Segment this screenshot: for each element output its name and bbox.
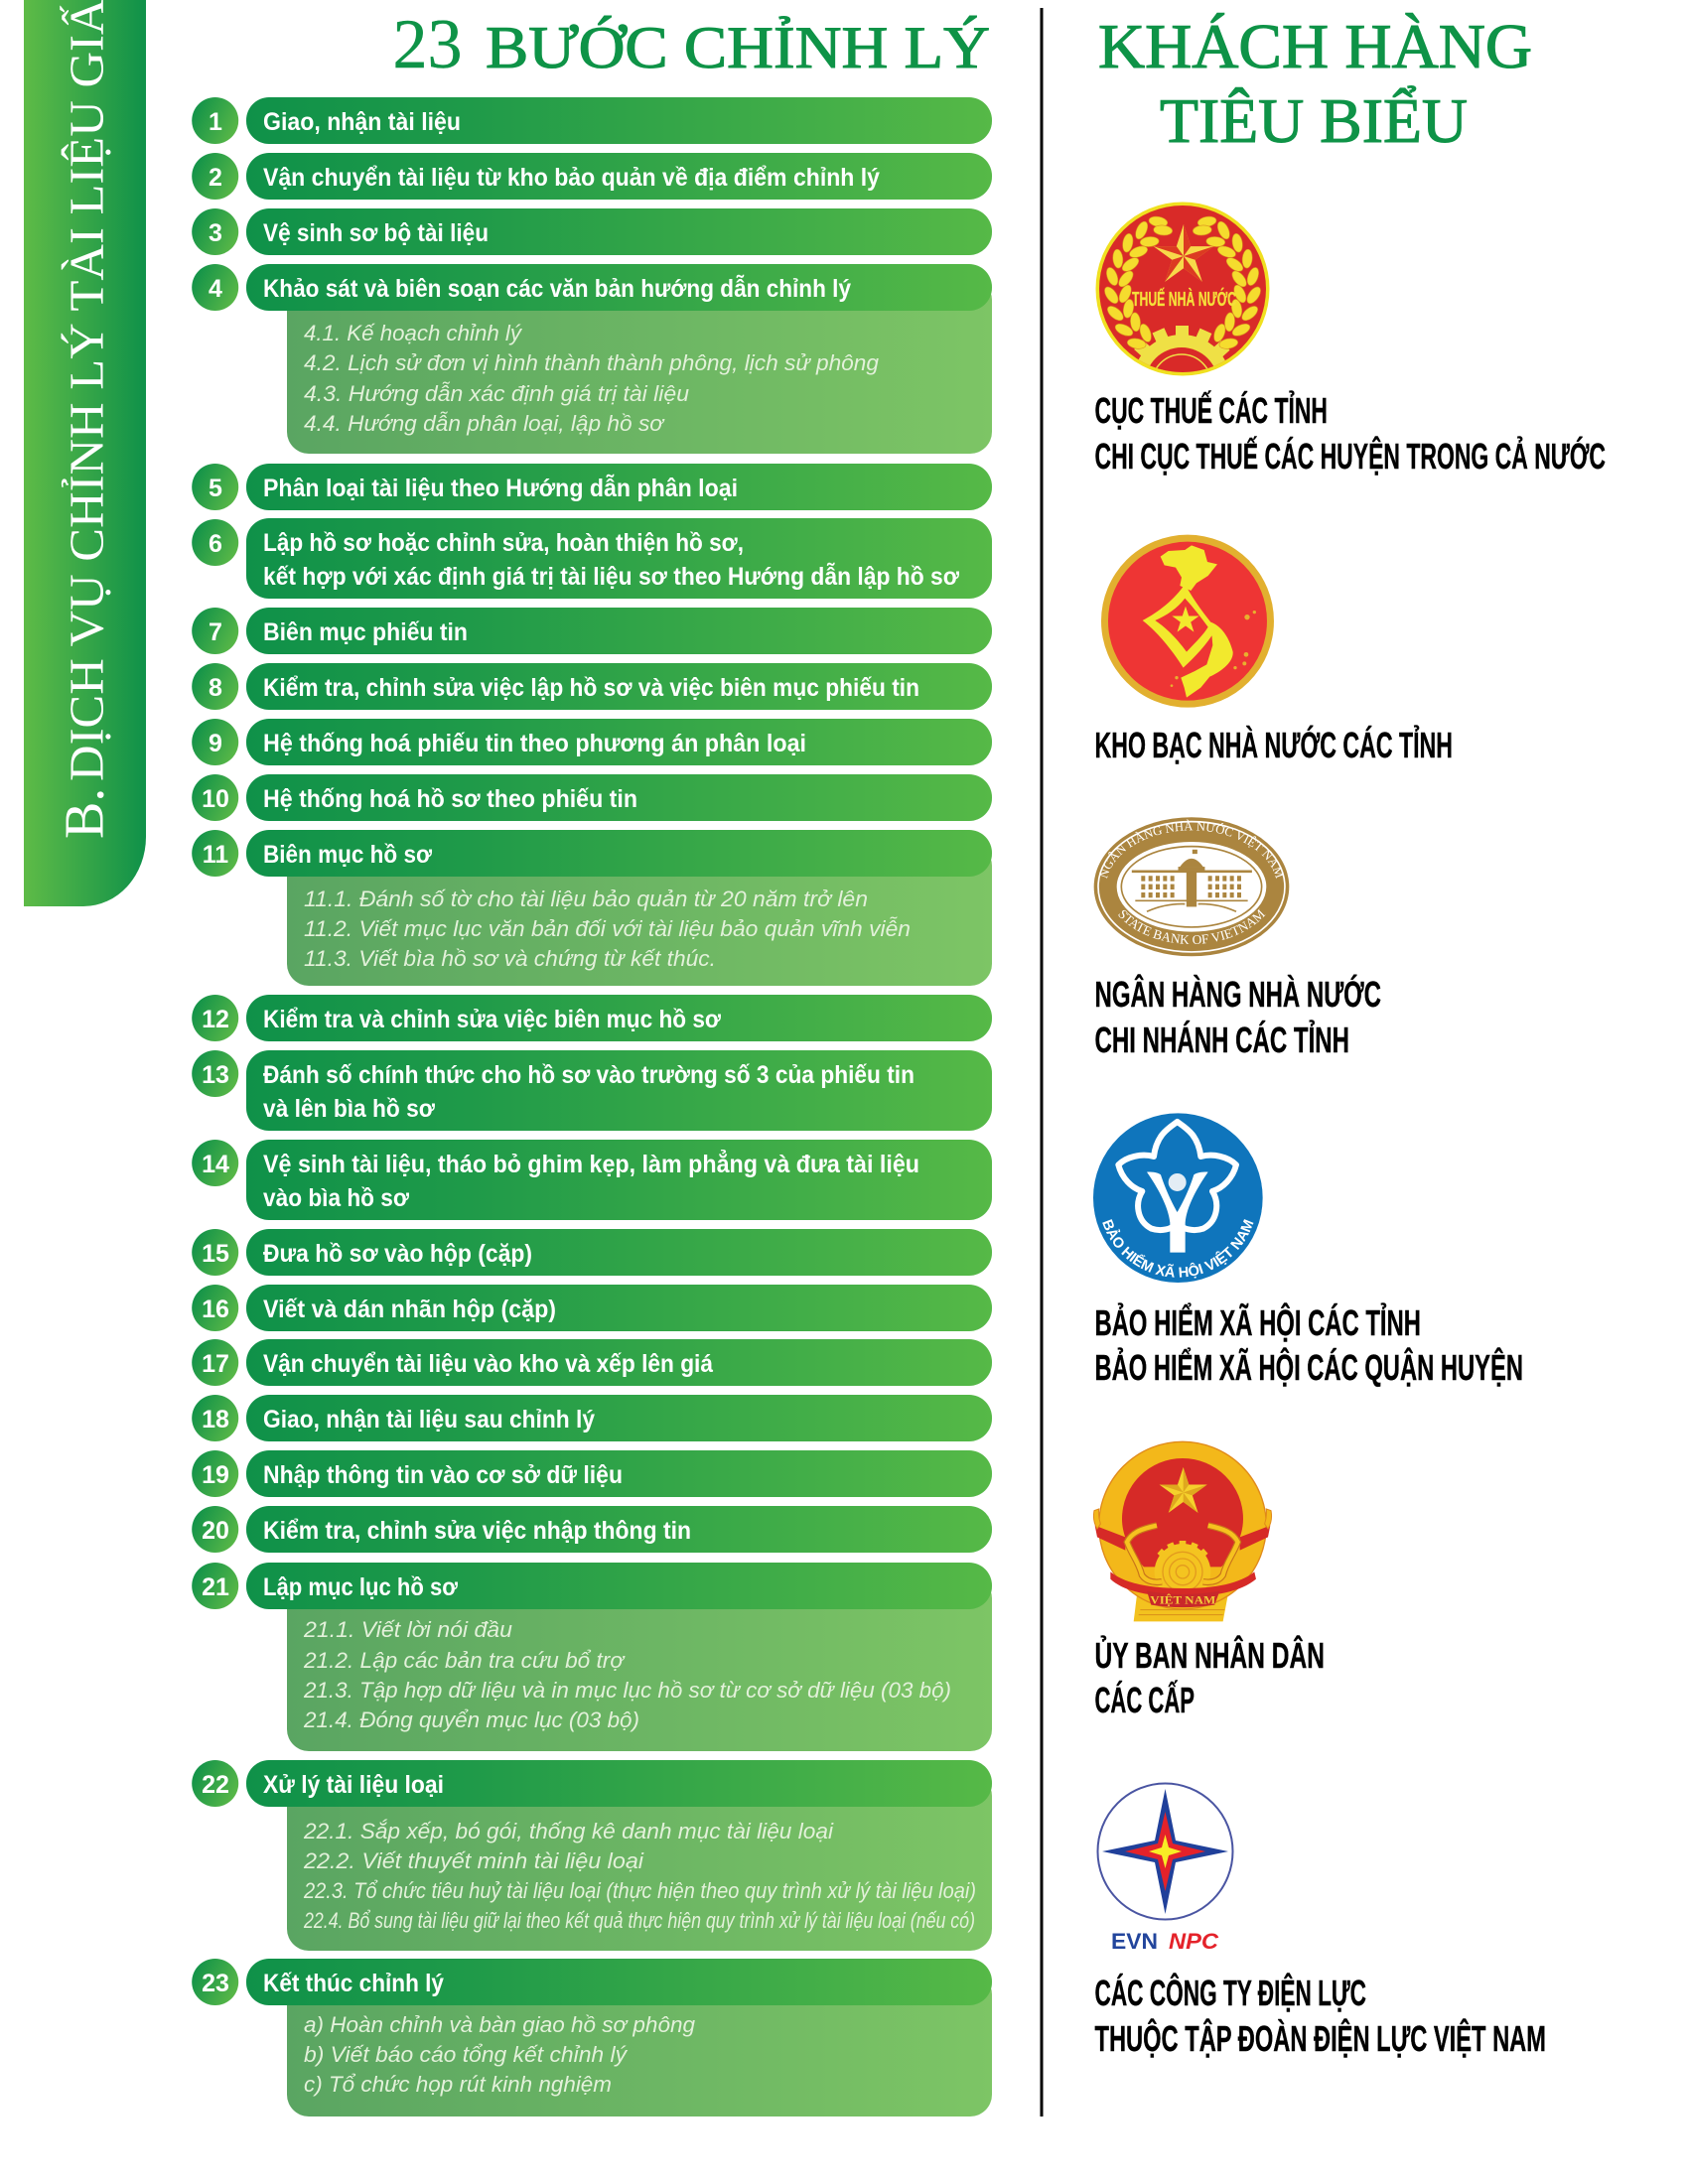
icon: tax department emblem: THUẾ NHÀ NƯỚC — [1132, 287, 1236, 311]
title: 23 steps: BƯỚC CHỈNH LÝ — [486, 15, 990, 80]
badge 3: 3 — [209, 219, 222, 247]
bar 14 — [246, 1140, 992, 1220]
bar 2 — [246, 153, 992, 200]
sub-items 22: 22.1. Sắp xếp, bó gói, thống kê danh mục tài liệu loại — [303, 1819, 834, 1843]
badge 2: 2 — [209, 164, 222, 192]
sub-items 21: 21.2. Lập các bản tra cứu bổ trợ — [303, 1648, 626, 1673]
bar 6 — [246, 518, 992, 599]
caption: power companies: CÁC CÔNG TY ĐIỆN LỰC — [1094, 1972, 1366, 2013]
label 4: Khảo sát và biên soạn các văn bản hướng dẫn chỉnh lý — [263, 273, 851, 303]
bar 4 — [246, 264, 992, 311]
bar 22 — [246, 1760, 992, 1807]
bar 18 — [246, 1395, 992, 1441]
badge 11 — [192, 830, 238, 877]
bar 10 — [246, 774, 992, 821]
label 20: Kiểm tra, chỉnh sửa việc nhập thông tin — [263, 1517, 691, 1545]
label 10: Hệ thống hoá hồ sơ theo phiếu tin — [263, 785, 637, 813]
bar 11 — [246, 830, 992, 877]
heading: key clients — [1098, 12, 1532, 156]
label 14 — [263, 1148, 919, 1212]
icon: social insurance emblem: BẢO HIỂM XÃ HỘI VIỆT NAM — [1102, 1219, 1253, 1279]
sub-items 11: 11.2. Viết mục lục văn bản đối với tài liệu bảo quản vĩnh viễn — [304, 916, 911, 941]
badge 1: 1 — [209, 108, 222, 136]
badge 15 — [192, 1229, 238, 1276]
badge 5: 5 — [209, 475, 222, 502]
step 1 — [192, 97, 992, 144]
label 19: Nhập thông tin vào cơ sở dữ liệu — [263, 1461, 623, 1489]
step 18 — [192, 1395, 992, 1441]
badge 22 — [192, 1760, 238, 1807]
badge 6 — [192, 519, 238, 566]
step 20 — [192, 1506, 992, 1553]
label 5: Phân loại tài liệu theo Hướng dẫn phân loại — [263, 473, 738, 502]
sub-items 23: b) Viết báo cáo tổng kết chỉnh lý — [304, 2042, 629, 2067]
side banner title: B. — [54, 788, 115, 839]
label 15: Đưa hồ sơ vào hộp (cặp) — [263, 1240, 532, 1268]
badge 16: 16 — [202, 1296, 229, 1323]
label 7: Biên mục phiếu tin — [263, 618, 468, 646]
label 6 — [263, 529, 959, 591]
badge 17: 17 — [202, 1350, 229, 1378]
sub-items 22 — [303, 1819, 976, 1933]
caption: social insurance — [1094, 1301, 1523, 1388]
badge 18 — [192, 1395, 238, 1441]
bar 8 — [246, 663, 992, 710]
caption: social insurance: BẢO HIỂM XÃ HỘI CÁC TỈNH — [1094, 1301, 1421, 1343]
step 3 — [192, 208, 992, 255]
bar 9 — [246, 719, 992, 765]
step 4 — [192, 264, 992, 454]
step 19 — [192, 1450, 992, 1497]
badge 18: 18 — [202, 1406, 229, 1433]
step 10 — [192, 774, 992, 821]
sub-items 4: 4.4. Hướng dẫn phân loại, lập hồ sơ — [304, 411, 665, 436]
sub-list panel 22 — [287, 1774, 992, 1951]
step 22 — [192, 1760, 992, 1951]
badge 8 — [192, 663, 238, 710]
bar 15 — [246, 1229, 992, 1276]
badge 5 — [192, 464, 238, 510]
bar 21 — [246, 1563, 992, 1609]
label 6: kết hợp với xác định giá trị tài liệu sơ theo Hướng dẫn lập hồ sơ — [263, 561, 959, 591]
badge 11: 11 — [203, 841, 228, 869]
sub-items 23 — [304, 2012, 696, 2097]
caption: people's committees — [1094, 1634, 1325, 1720]
label 22: Xử lý tài liệu loại — [263, 1771, 444, 1799]
icon: state treasury emblem — [1101, 535, 1274, 708]
caption: state bank: NGÂN HÀNG NHÀ NƯỚC — [1094, 973, 1381, 1015]
step 9 — [192, 719, 992, 765]
label 21: Lập mục lục hồ sơ — [263, 1573, 458, 1601]
badge 7 — [192, 608, 238, 654]
sub-items 22: 22.2. Viết thuyết minh tài liệu loại — [303, 1848, 644, 1873]
label 18: Giao, nhận tài liệu sau chỉnh lý — [263, 1406, 595, 1433]
badge 2 — [192, 153, 238, 200]
badge 9 — [192, 719, 238, 765]
label 23: Kết thúc chỉnh lý — [263, 1970, 444, 1997]
sub-items 11: 11.1. Đánh số tờ cho tài liệu bảo quản từ 20 năm trở lên — [304, 887, 868, 911]
step 6 — [192, 518, 992, 599]
sub-items 23: c) Tổ chức họp rút kinh nghiệm — [304, 2072, 612, 2097]
heading: key clients: KHÁCH HÀNG — [1098, 12, 1532, 81]
sub-items 21 — [303, 1617, 951, 1732]
label 14: Vệ sinh tài liệu, tháo bỏ ghim kẹp, làm phẳng và đưa tài liệu — [263, 1148, 919, 1178]
bar 23 — [246, 1959, 992, 2005]
sub-items 4: 4.2. Lịch sử đơn vị hình thành thành phông, lịch sử phông — [304, 350, 880, 375]
step 12 — [192, 995, 992, 1041]
badge 12 — [192, 995, 238, 1041]
label 2: Vận chuyển tài liệu từ kho bảo quản về địa điểm chỉnh lý — [263, 164, 880, 192]
bar 16 — [246, 1285, 992, 1331]
badge 14 — [192, 1140, 238, 1186]
bar 1 — [246, 97, 992, 144]
badge 1 — [192, 97, 238, 144]
sub-items 21: 21.1. Viết lời nói đầu — [303, 1617, 512, 1642]
step 5 — [192, 464, 992, 510]
step 16 — [192, 1285, 992, 1331]
step 21 — [192, 1563, 992, 1751]
icon: state bank emblem: STATE BANK OF VIETNAM — [1118, 909, 1265, 944]
label 3: Vệ sinh sơ bộ tài liệu — [263, 219, 489, 247]
badge 4: 4 — [209, 275, 222, 303]
label 6: Lập hồ sơ hoặc chỉnh sửa, hoàn thiện hồ sơ, — [263, 529, 744, 557]
bar 5 — [246, 464, 992, 510]
badge 3 — [192, 208, 238, 255]
icon: state bank emblem — [1094, 817, 1289, 957]
badge 12: 12 — [202, 1006, 229, 1033]
bar 20 — [246, 1506, 992, 1553]
badge 6: 6 — [209, 530, 222, 558]
sub-items 22: 22.3. Tổ chức tiêu huỷ tài liệu loại (thực hiện theo quy trình xử lý tài liệu loại) — [303, 1878, 976, 1903]
badge 19 — [192, 1450, 238, 1497]
icon: national emblem — [1093, 1441, 1271, 1621]
step 7 — [192, 608, 992, 654]
label 13 — [263, 1061, 914, 1123]
bar 7 — [246, 608, 992, 654]
icon: EVN NPC logo — [1098, 1783, 1233, 1954]
label 11: Biên mục hồ sơ — [263, 841, 432, 869]
sub-items 21: 21.4. Đóng quyển mục lục (03 bộ) — [303, 1707, 639, 1732]
caption: people's committees: ỦY BAN NHÂN DÂN — [1094, 1634, 1325, 1676]
badge 17 — [192, 1339, 238, 1386]
icon: EVN NPC logo: EVN — [1111, 1929, 1158, 1954]
badge 15: 15 — [202, 1240, 229, 1268]
side banner — [24, 0, 146, 906]
badge 23 — [192, 1959, 238, 2005]
step 13 — [192, 1050, 992, 1131]
label 17: Vận chuyển tài liệu vào kho và xếp lên giá — [263, 1350, 713, 1378]
sub-list panel 23 — [287, 1973, 992, 2116]
badge 9: 9 — [209, 730, 222, 757]
badge 21 — [192, 1563, 238, 1609]
sub-items 22: 22.4. Bổ sung tài liệu giữ lại theo kết quả thực hiện quy trình xử lý tài liệu loại (nếu có) — [303, 1908, 975, 1933]
badge 21: 21 — [202, 1573, 229, 1601]
bar 12 — [246, 995, 992, 1041]
icon: social insurance emblem — [1093, 1113, 1263, 1283]
badge 10: 10 — [202, 785, 229, 813]
label 13: Đánh số chính thức cho hồ sơ vào trường số 3 của phiếu tin — [263, 1061, 914, 1089]
badge 13: 13 — [202, 1061, 229, 1089]
icon: national emblem: VIỆT NAM — [1150, 1593, 1216, 1606]
badge 4 — [192, 264, 238, 311]
caption: power companies — [1094, 1972, 1546, 2059]
sub-list panel 21 — [287, 1576, 992, 1751]
title: 23 steps: 23 — [393, 6, 463, 83]
label 13: và lên bìa hồ sơ — [263, 1095, 435, 1123]
caption: state bank — [1094, 973, 1381, 1060]
bar 13 — [246, 1050, 992, 1131]
caption: state bank: CHI NHÁNH CÁC TỈNH — [1094, 1020, 1349, 1060]
label 14: vào bìa hồ sơ — [263, 1184, 409, 1212]
title: 23 steps — [393, 6, 990, 83]
badge 8: 8 — [209, 674, 222, 702]
icon: tax department emblem — [1096, 203, 1269, 375]
badge 10 — [192, 774, 238, 821]
badge 19: 19 — [202, 1461, 229, 1489]
label 9: Hệ thống hoá phiếu tin theo phương án phân loại — [263, 730, 806, 757]
step 8 — [192, 663, 992, 710]
sub-items 23: a) Hoàn chỉnh và bàn giao hồ sơ phông — [304, 2012, 696, 2037]
step 23 — [192, 1959, 992, 2116]
step 15 — [192, 1229, 992, 1276]
label 16: Viết và dán nhãn hộp (cặp) — [263, 1296, 556, 1323]
bar 19 — [246, 1450, 992, 1497]
heading: key clients: TIÊU BIỂU — [1160, 85, 1468, 156]
caption: state treasury: KHO BẠC NHÀ NƯỚC CÁC TỈNH — [1094, 724, 1453, 765]
sub-items 4: 4.1. Kế hoạch chỉnh lý — [304, 321, 523, 345]
icon: EVN NPC logo: NPC — [1169, 1929, 1219, 1954]
sub-items 4 — [304, 321, 880, 436]
caption: tax departments: CỤC THUẾ CÁC TỈNH — [1094, 390, 1328, 431]
label 8: Kiểm tra, chỉnh sửa việc lập hồ sơ và việc biên mục phiếu tin — [263, 674, 919, 702]
sub-items 11: 11.3. Viết bìa hồ sơ và chứng từ kết thúc. — [304, 946, 716, 971]
badge 13 — [192, 1050, 238, 1097]
side banner title: DỊCH VỤ CHỈNH LÝ TÀI LIỆU GIẤY — [60, 0, 113, 781]
badge 7: 7 — [209, 618, 222, 646]
badge 16 — [192, 1285, 238, 1331]
step 14 — [192, 1140, 992, 1220]
step 11 — [192, 830, 992, 986]
sub-items 21: 21.3. Tập hợp dữ liệu và in mục lục hồ sơ từ cơ sở dữ liệu (03 bộ) — [303, 1678, 951, 1703]
caption: tax departments — [1094, 390, 1606, 477]
sub-items 4: 4.3. Hướng dẫn xác định giá trị tài liệu — [304, 381, 689, 406]
label 12: Kiểm tra và chỉnh sửa việc biên mục hồ sơ — [263, 1006, 721, 1033]
icon: state bank emblem: NGÂN HÀNG NHÀ NƯỚC VIỆT NAM — [1100, 820, 1283, 880]
badge 22: 22 — [202, 1771, 229, 1799]
sub-items 11 — [304, 887, 911, 971]
step 17 — [192, 1339, 992, 1386]
sub-list panel 4 — [287, 278, 992, 454]
badge 20 — [192, 1506, 238, 1553]
badge 14: 14 — [202, 1151, 229, 1178]
badge 23: 23 — [202, 1970, 229, 1997]
bar 17 — [246, 1339, 992, 1386]
label 1: Giao, nhận tài liệu — [263, 108, 461, 136]
sub-list panel 11 — [287, 844, 992, 986]
step 2 — [192, 153, 992, 200]
caption: people's committees: CÁC CẤP — [1094, 1680, 1195, 1720]
badge 20: 20 — [202, 1517, 229, 1545]
bar 3 — [246, 208, 992, 255]
